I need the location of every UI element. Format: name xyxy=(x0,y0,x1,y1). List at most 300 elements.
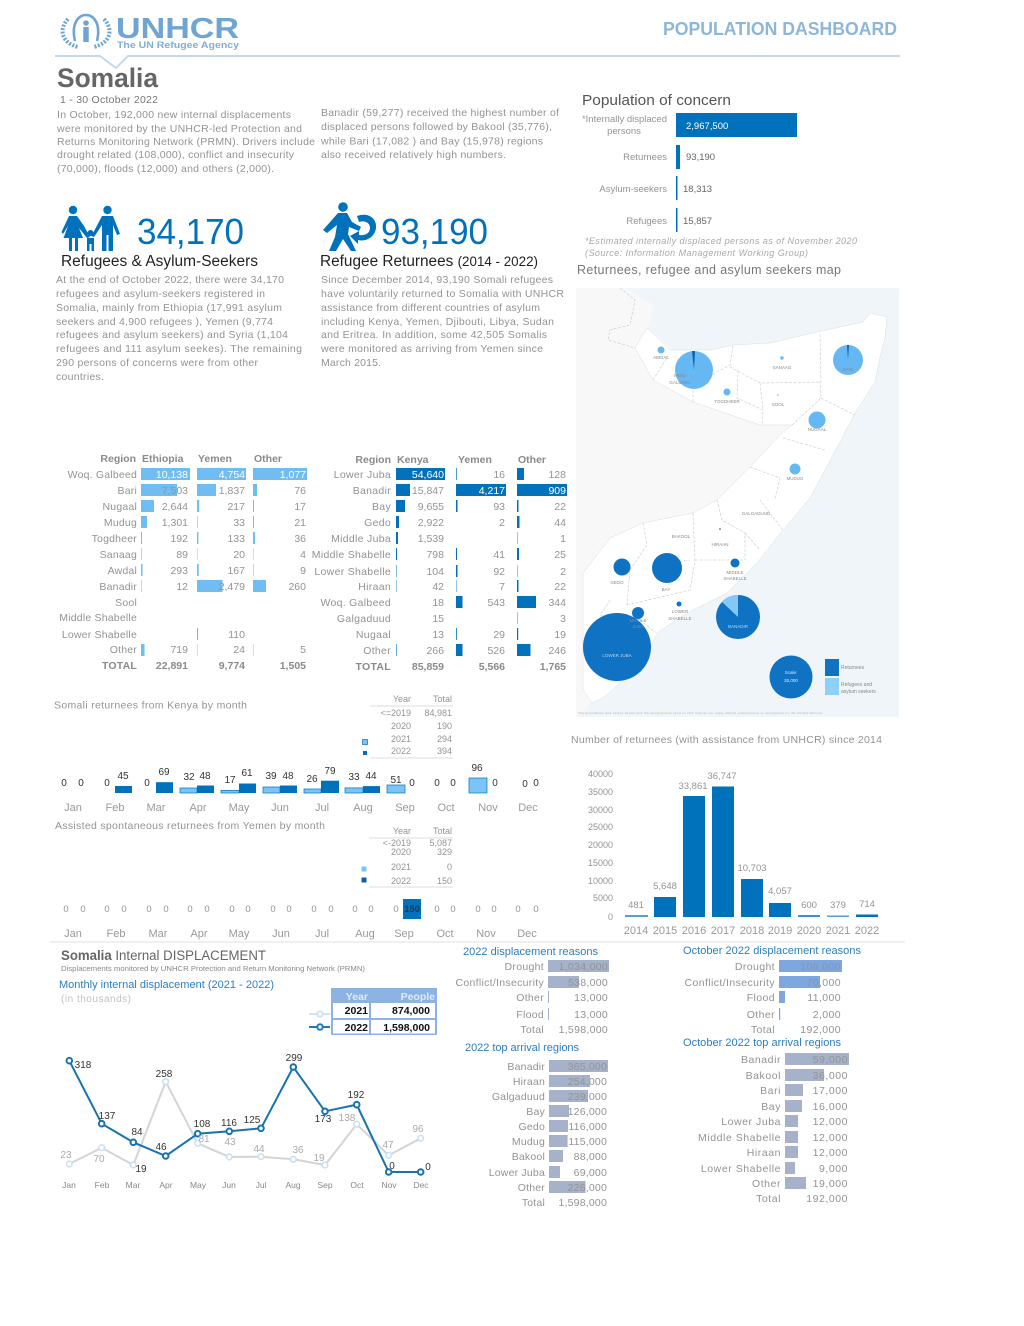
month axis: Oct xyxy=(350,1180,364,1190)
bar: refugees: 15,857 xyxy=(683,216,712,227)
rows: Bakool xyxy=(512,1151,545,1163)
Yemen zero labels: 0 xyxy=(80,904,86,915)
rows: Drought xyxy=(505,961,544,973)
bar: asylum-seekers: Asylum-seekers xyxy=(599,184,667,195)
panel: population of concern xyxy=(582,93,857,258)
map region labels: SOOL xyxy=(772,402,785,407)
table: October 2022 top arrival regions xyxy=(683,1037,849,1205)
table header: Other xyxy=(254,453,282,465)
y axis labels: 40000 xyxy=(588,769,613,779)
rows: 9,000 xyxy=(819,1163,848,1175)
Kenya value labels: 51 xyxy=(390,775,402,786)
month axis: Feb xyxy=(95,1180,110,1190)
Yemen zero labels: 0 xyxy=(270,904,276,915)
footnote: (Source: Information Management Working Group) xyxy=(585,248,808,258)
Yemen zero labels: 0 xyxy=(328,904,334,915)
Kenya value labels: 17 xyxy=(224,775,236,786)
table values: 24 xyxy=(233,644,245,656)
table values: 25 xyxy=(554,549,566,561)
Yemen zero labels: 0 xyxy=(475,904,481,915)
data labels: 2021: 36 xyxy=(292,1145,304,1156)
table header: Yemen xyxy=(458,454,492,466)
rows: Total xyxy=(756,1193,781,1205)
Kenya value labels: 0 xyxy=(522,779,528,790)
y axis labels: 20000 xyxy=(588,840,613,850)
month axis: Jan xyxy=(62,1180,76,1190)
Yemen zero labels: 0 xyxy=(450,904,456,915)
table values: 18 xyxy=(432,597,444,609)
text block: refugees description: countries. xyxy=(56,371,104,383)
table row labels: Awdal xyxy=(108,565,137,577)
Kenya value labels: 39 xyxy=(265,771,277,782)
table heading: October 2022 displacement reasons xyxy=(683,945,862,957)
bar value labels: 33,861 xyxy=(678,781,708,792)
rows: Mudug xyxy=(512,1136,545,1148)
data labels: 2021: 96 xyxy=(412,1124,424,1135)
table values: 4,217 xyxy=(479,485,505,497)
logo wordmark: UNHCR xyxy=(116,13,239,45)
data labels: 2022: 46 xyxy=(155,1142,167,1153)
table values: 36 xyxy=(294,533,306,545)
rows: Flood xyxy=(516,1009,544,1021)
table values: 7 xyxy=(499,581,505,593)
bars xyxy=(549,1060,608,1193)
rows: Other xyxy=(518,1182,545,1194)
rows: Banadir xyxy=(507,1061,545,1073)
table values: 93 xyxy=(493,501,505,513)
table row labels: Hiraan xyxy=(358,581,391,593)
mini table: Kenya yearly totals xyxy=(362,694,453,758)
rows: 12,000 xyxy=(813,1147,848,1159)
Kenya value labels: 48 xyxy=(282,771,294,782)
mini table: Kenya yearly totals: 84,981 xyxy=(424,708,452,718)
footnote xyxy=(585,236,857,258)
map region labels: WOQ. xyxy=(674,373,686,378)
stat: 34,170: 34,170 xyxy=(137,211,244,252)
Kenya value labels: 44 xyxy=(365,771,377,782)
table values: 54,640 xyxy=(412,469,444,481)
unit note: (in thousands) xyxy=(61,994,131,1005)
footnote: *Estimated internally displaced persons as of November 2020 xyxy=(585,236,857,246)
rows: 192,000 xyxy=(800,1024,841,1036)
text block: returnees description: March 2015. xyxy=(321,357,381,369)
data labels: 2022: 116 xyxy=(221,1118,237,1129)
mini table: Yemen yearly totals: 2020 xyxy=(391,847,411,857)
table row labels: Sanaag xyxy=(100,549,137,561)
Yemen zero labels: 0 xyxy=(163,904,169,915)
table row labels: Nugaal xyxy=(103,501,137,513)
table header: Region xyxy=(100,453,136,465)
text block: returnees description: assistance from different countries of asylum xyxy=(321,302,540,314)
heading: Refugees and Asylum-Seekers: Refugees & Asylum-Seekers xyxy=(61,253,258,270)
rows: 19,000 xyxy=(813,1178,848,1190)
month axis: May xyxy=(190,1180,207,1190)
Kenya month axis: Mar xyxy=(147,802,166,814)
x axis years: 2017 xyxy=(711,925,735,937)
mini table: Kenya yearly totals: 2022 xyxy=(391,746,411,756)
table values: 19 xyxy=(554,629,566,641)
legend table: People xyxy=(401,991,435,1003)
table row labels: Middle Shabelle xyxy=(59,612,137,624)
table header xyxy=(100,453,282,465)
rows: 17,000 xyxy=(813,1085,848,1097)
stat: 93,190: 93,190 xyxy=(381,211,488,252)
Yemen month axis: Oct xyxy=(436,928,454,940)
chart title: Number of returnees (with assistance from UNHCR) since 2014 xyxy=(571,734,882,746)
Yemen month axis: Apr xyxy=(190,928,208,940)
bars xyxy=(779,960,842,1020)
data labels: 2022: 0 xyxy=(389,1161,395,1172)
rows: 88,000 xyxy=(574,1151,607,1163)
table: 2022 displacement reasons xyxy=(455,946,609,1036)
Kenya month axis: Aug xyxy=(353,802,373,814)
Kenya month axis: Nov xyxy=(478,802,498,814)
rows: Bari xyxy=(760,1085,781,1097)
map region labels: BARI xyxy=(843,367,853,372)
icon: UNHCR emblem xyxy=(63,15,109,47)
rows: Other xyxy=(516,992,544,1004)
table values: 29 xyxy=(493,629,505,641)
table values: 21 xyxy=(294,517,306,529)
table values: 133 xyxy=(227,533,245,545)
rows: 11,000 xyxy=(807,992,841,1004)
map region labels: AWDAL xyxy=(653,355,669,360)
rows: 16,000 xyxy=(813,1101,848,1113)
rows: 254,000 xyxy=(568,1076,607,1088)
map region labels: GALBEED xyxy=(669,380,691,385)
table header: Ethiopia xyxy=(142,453,184,465)
table values: 7,503 xyxy=(162,485,188,497)
map region labels: MIDDLE xyxy=(726,570,744,575)
rows: 69,000 xyxy=(574,1167,607,1179)
data labels: 2021: 47 xyxy=(382,1140,394,1151)
line series: 2022 xyxy=(66,1058,424,1175)
map disclaimer: The boundaries and names shown and the designations used on this map do not imply official endorsement or acceptance by the United Nations. xyxy=(578,711,823,715)
icon: refugee family xyxy=(62,206,120,251)
rows: 13,000 xyxy=(574,1009,608,1021)
table values: 798 xyxy=(426,549,444,561)
rows: 116,000 xyxy=(568,1121,607,1133)
mini table: Kenya yearly totals: 294 xyxy=(437,734,452,744)
y axis labels: 0 xyxy=(608,912,613,922)
rows xyxy=(489,1061,607,1209)
Kenya value labels: 26 xyxy=(306,774,318,785)
month axis: Jul xyxy=(256,1180,267,1190)
Yemen zero labels: 0 xyxy=(286,904,292,915)
map region labels: BAKOOL xyxy=(672,534,691,539)
map region labels: SHABELLE xyxy=(723,576,747,581)
table values: 13 xyxy=(432,629,444,641)
Yemen zero labels: 0 xyxy=(352,904,358,915)
heading: map title: Returnees, refugee and asylum seekers map xyxy=(577,263,841,277)
Yemen bar xyxy=(403,899,421,919)
rows: Total xyxy=(751,1024,775,1036)
Yemen month axis: May xyxy=(229,928,250,940)
table row labels: Galgaduud xyxy=(337,613,391,625)
text block: October summary: were monitored by the UNHCR-led Protection and xyxy=(56,123,302,135)
map region labels: GEDO xyxy=(610,580,624,585)
table header xyxy=(355,454,546,466)
table row labels: Other xyxy=(110,644,137,656)
month axis: Jun xyxy=(222,1180,236,1190)
legend table: 874,000 xyxy=(392,1005,430,1017)
table values: 92 xyxy=(493,566,505,578)
table: 2022 top arrival regions xyxy=(465,1042,608,1209)
chart: number of returnees since 2014 xyxy=(571,734,882,937)
table row labels: TOTAL xyxy=(355,661,391,673)
table values xyxy=(412,469,566,673)
map region labels: HIRAAN xyxy=(711,542,729,547)
map region labels: GALGADUUD xyxy=(742,511,771,516)
rows: 36,000 xyxy=(813,1070,848,1082)
rows: 2,000 xyxy=(813,1009,841,1021)
bar: returnees: Returnees xyxy=(623,152,667,163)
mini table: Yemen yearly totals: 2021 xyxy=(391,862,411,872)
data labels: 2022: 84 xyxy=(131,1127,143,1138)
table values: 260 xyxy=(288,581,306,593)
Kenya value labels: 48 xyxy=(199,771,211,782)
Yemen zero labels xyxy=(63,904,539,915)
y axis labels: 25000 xyxy=(588,822,613,832)
table values: 42 xyxy=(432,581,444,593)
table values: 1,505 xyxy=(280,660,306,672)
data labels: 2021: 43 xyxy=(224,1137,236,1148)
y axis labels: 5000 xyxy=(593,893,613,903)
data labels: 2022: 0 xyxy=(425,1162,431,1173)
x axis years: 2022 xyxy=(855,925,879,937)
Kenya value labels: 0 xyxy=(434,778,440,789)
rows: 115,000 xyxy=(568,1136,607,1148)
Kenya value labels: 0 xyxy=(104,778,110,789)
text block: refugees description: seekers and 4,900 refugees ), Yemen (9,774 xyxy=(56,316,273,328)
data labels: 2022: 318 xyxy=(75,1060,92,1071)
subheading: Displacements monitored by UNHCR Protection and Return Monitoring Network (PRMN) xyxy=(61,964,366,973)
Yemen zero labels: 0 xyxy=(63,904,69,915)
chart title: Somali returnees from Kenya by month xyxy=(54,700,247,712)
rows: Bakool xyxy=(746,1070,781,1082)
table values: 33 xyxy=(233,517,245,529)
table bars xyxy=(396,468,567,656)
Yemen zero labels: 0 xyxy=(491,904,497,915)
Yemen month axis: Mar xyxy=(149,928,168,940)
text block: October summary: drought related (108,000), conflict and insecurity xyxy=(57,149,295,161)
bar: asylum-seekers: 18,313 xyxy=(683,184,712,195)
text block: October summary: Returns Monitoring Network (PRMN). Drivers include xyxy=(57,136,315,148)
rows: 1,598,000 xyxy=(559,1024,608,1036)
table values: 192 xyxy=(170,533,188,545)
mini table: Yemen yearly totals: 150 xyxy=(437,876,452,886)
table header: Kenya xyxy=(397,454,429,466)
map region labels: JUBA xyxy=(632,624,644,629)
y axis labels xyxy=(588,769,613,922)
table values: 44 xyxy=(554,517,566,529)
Yemen month axis: Nov xyxy=(476,928,496,940)
table values: 41 xyxy=(493,549,505,561)
rows: 239,000 xyxy=(568,1091,607,1103)
table row labels: Other xyxy=(363,645,391,657)
Kenya value labels: 0 xyxy=(492,778,498,789)
data labels: 2021: 44 xyxy=(253,1144,265,1155)
mini table: Yemen yearly totals: Year xyxy=(393,826,411,836)
text block: returnees description: Since December 2014, 93,190 Somali refugees xyxy=(321,274,553,286)
month axis: Mar xyxy=(126,1180,140,1190)
Kenya value labels: 0 xyxy=(450,778,456,789)
heading: Somalia: Somalia xyxy=(57,63,159,93)
table values: 12 xyxy=(176,581,188,593)
rows: Conflict/Insecurity xyxy=(685,977,775,989)
mini table: Yemen yearly totals: 5,087 xyxy=(429,838,452,848)
mini table: Yemen yearly totals xyxy=(362,826,453,887)
table values: 719 xyxy=(170,644,188,656)
text block: arrival regions summary xyxy=(320,107,559,161)
table values: 2,644 xyxy=(162,501,188,513)
Yemen zero labels: 0 xyxy=(368,904,374,915)
table values: 2,479 xyxy=(219,581,245,593)
table values: 3 xyxy=(560,613,566,625)
table bars xyxy=(141,468,307,656)
table values: 1,077 xyxy=(280,469,306,481)
table header: Yemen xyxy=(198,453,232,465)
Yemen month axis: Feb xyxy=(107,928,125,940)
table values: 909 xyxy=(548,485,566,497)
table values: 1,837 xyxy=(219,485,245,497)
Kenya value labels: 0 xyxy=(533,778,539,789)
table row labels: Woq. Galbeed xyxy=(68,469,137,481)
table row labels: Middle Shabelle xyxy=(312,549,391,561)
legend line markers xyxy=(309,1011,330,1030)
Kenya value labels: 33 xyxy=(348,772,360,783)
Yemen month axis: Aug xyxy=(355,928,375,940)
text block: refugees description: refugees and asylum-seekers registered in xyxy=(56,288,265,300)
month axis: Nov xyxy=(381,1180,397,1190)
rows: 126,000 xyxy=(568,1106,607,1118)
bar value labels: 379 xyxy=(830,900,846,911)
rows: 192,000 xyxy=(806,1193,848,1205)
Yemen zero labels: 0 xyxy=(434,904,440,915)
rows: Conflict/Insecurity xyxy=(455,977,544,989)
table row labels xyxy=(59,469,137,672)
table values: 246 xyxy=(548,645,566,657)
map region labels: BAY xyxy=(662,587,670,592)
Kenya value labels: 96 xyxy=(471,763,483,774)
data labels: 2021: 19 xyxy=(313,1153,325,1164)
data labels: 2021: 23 xyxy=(60,1150,72,1161)
data labels: 2022: 258 xyxy=(156,1069,173,1080)
Kenya month axis xyxy=(64,802,538,814)
map region labels: NUGAAL xyxy=(808,427,827,432)
table row labels: Lower Juba xyxy=(334,469,391,481)
table values: 9,774 xyxy=(219,660,245,672)
rows: 70,000 xyxy=(806,977,841,989)
month axis: Apr xyxy=(159,1180,173,1190)
month axis: Dec xyxy=(413,1180,429,1190)
Kenya month axis: Jan xyxy=(64,802,82,814)
table values: 5,566 xyxy=(479,661,505,673)
mini table: Kenya yearly totals: Total xyxy=(433,694,452,704)
text block: returnees description: were monitored as arriving from Yemen since xyxy=(320,343,543,355)
text block: refugees description: 290 persons of concerns were from other xyxy=(56,357,258,369)
table values: 128 xyxy=(548,469,566,481)
x axis years: 2014 xyxy=(624,925,648,937)
data labels: 2021: 138 xyxy=(339,1113,356,1124)
text block: refugees description xyxy=(56,274,302,383)
map scale bubble: Scale: xyxy=(785,670,797,675)
bar: asylum-seekers xyxy=(599,176,712,200)
table values: 9,655 xyxy=(418,501,444,513)
Yemen zero labels: 0 xyxy=(187,904,193,915)
Yemen zero labels: 0 xyxy=(245,904,251,915)
Yemen zero labels: 0 xyxy=(393,904,399,915)
mini table: Yemen yearly totals: <-2019 xyxy=(383,838,411,848)
panel: Somalia internal displacement xyxy=(59,948,437,1190)
month axis: Sep xyxy=(317,1180,333,1190)
map legend: Returnees xyxy=(841,665,865,671)
rows xyxy=(685,961,841,1036)
data labels: 2021: 81 xyxy=(198,1134,210,1145)
data labels: 2022: 173 xyxy=(315,1114,332,1125)
table row labels: Banadir xyxy=(99,581,137,593)
text block: arrival regions summary: while Bari (17,082 ) and Bay (15,978) regions xyxy=(320,136,543,148)
table values: 104 xyxy=(426,566,444,578)
table row labels: TOTAL xyxy=(102,660,137,672)
Yemen month axis: Jan xyxy=(64,928,82,940)
legend table xyxy=(331,988,437,1035)
x axis years: 2018 xyxy=(740,925,764,937)
map region labels: LOWER JUBA xyxy=(602,653,632,658)
rows: Galgaduud xyxy=(492,1091,545,1103)
date range: 1 - 30 October 2022 xyxy=(60,94,158,106)
x axis years: 2015 xyxy=(653,925,677,937)
x axis years: 2021 xyxy=(826,925,850,937)
table values: 266 xyxy=(426,645,444,657)
table row labels: Lower Shabelle xyxy=(62,629,137,641)
rows: 1,034,000 xyxy=(559,961,608,973)
rows: 12,000 xyxy=(813,1132,848,1144)
table values: 2 xyxy=(499,517,505,529)
mini table: Yemen yearly totals: Total xyxy=(433,826,452,836)
bar: internally displaced persons: persons xyxy=(607,126,641,137)
map region labels: LOWER xyxy=(672,609,689,614)
map scale bubble: 30,000 xyxy=(784,678,798,683)
Kenya month axis: May xyxy=(229,802,250,814)
rows: 59,000 xyxy=(813,1054,848,1066)
bar value labels: 36,747 xyxy=(707,771,737,782)
Kenya value labels: 0 xyxy=(78,778,84,789)
table row labels: Lower Shabelle xyxy=(314,566,391,578)
table values: 293 xyxy=(170,565,188,577)
mini table: Kenya yearly totals: 394 xyxy=(437,746,452,756)
legend table: 2022 xyxy=(345,1022,368,1034)
table row labels: Bari xyxy=(118,485,137,497)
table row labels: Middle Juba xyxy=(331,533,391,545)
bar value labels: 4,057 xyxy=(768,886,792,897)
data labels: 2022 xyxy=(75,1053,431,1175)
chart: assisted spontaneous returnees from Yemen by month xyxy=(55,820,539,940)
logo tagline: The UN Refugee Agency xyxy=(117,40,240,51)
table row labels: Nugaal xyxy=(356,629,391,641)
table values: 1,539 xyxy=(418,533,444,545)
map legend: Refugees and xyxy=(841,682,872,688)
Kenya value labels: 79 xyxy=(324,766,336,777)
table header: Other xyxy=(518,454,546,466)
table values: 85,859 xyxy=(412,661,444,673)
mini table: Yemen yearly totals: 2022 xyxy=(391,876,411,886)
rows: Hiraan xyxy=(513,1076,545,1088)
table row labels: Mudug xyxy=(104,517,137,529)
bars xyxy=(548,960,609,1020)
y axis labels: 10000 xyxy=(588,876,613,886)
rows: Hiraan xyxy=(747,1147,781,1159)
